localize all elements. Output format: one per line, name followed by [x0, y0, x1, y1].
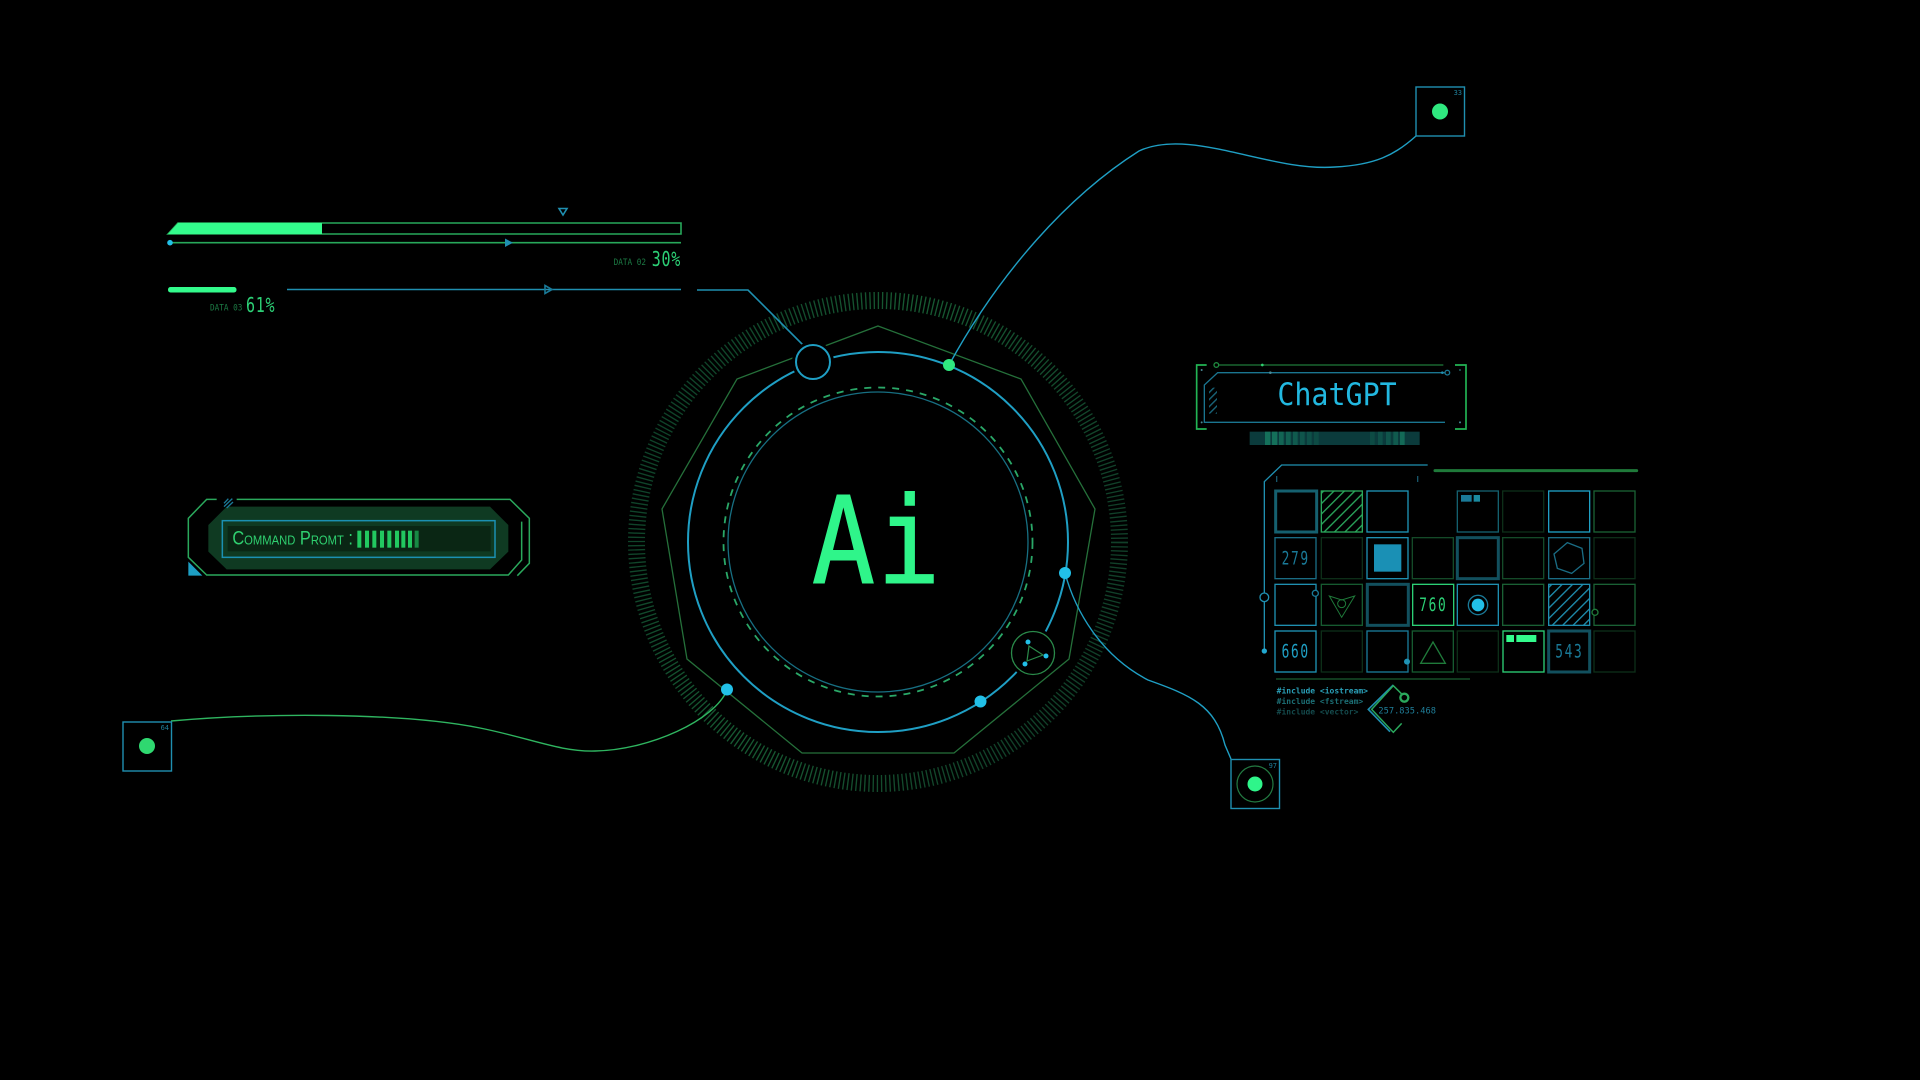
blue frame circle: [1445, 370, 1450, 375]
ring node: triangle: [1008, 628, 1058, 678]
green header bar: [1435, 466, 1637, 475]
input interior: [228, 526, 491, 551]
main blue ring: [688, 352, 1068, 732]
grid frame lines: [1264, 465, 1428, 652]
frame node: [1260, 593, 1269, 602]
central radial gauge: [636, 300, 1120, 784]
node box: bottom right: 97: [1269, 762, 1277, 770]
inner blue ring: [728, 392, 1028, 692]
ChatGPT header panel: [1197, 363, 1466, 445]
top green rail: [1219, 363, 1443, 367]
row 3 cells: [1275, 584, 1635, 625]
hatch mark: [224, 499, 233, 508]
rail start dot: [167, 240, 173, 246]
row 3 cells: 760: [1419, 593, 1447, 616]
frame dots: [1201, 369, 1461, 423]
nonagon outline: [662, 326, 1095, 753]
title: Ai: Ai: [812, 472, 942, 612]
data 02 caption: DATA 02: [614, 257, 646, 268]
row 2 cells: 279: [1282, 547, 1310, 569]
blue input box: [222, 521, 495, 557]
bracket right: [1455, 365, 1466, 429]
prompt text: Command Promt :: [232, 528, 353, 549]
number readout: 257.835.468: [1378, 706, 1436, 716]
short bar: [168, 287, 236, 292]
curve to left node: [171, 690, 727, 751]
tick ring: [636, 300, 1120, 784]
connector line to data bar: [697, 290, 805, 347]
diamond blue shadow: [1368, 685, 1393, 732]
row 1 cells: [1276, 491, 1635, 532]
blue frame: [1204, 373, 1445, 422]
data 02 value: 30%: [652, 248, 681, 272]
bar rail: [170, 242, 681, 244]
data grid panel: [1260, 465, 1637, 679]
rail dot: [1261, 364, 1264, 366]
rail circle: [1214, 363, 1219, 367]
command prompt panel: [188, 499, 529, 576]
curve to top right node: [949, 136, 1416, 365]
row 4 cells: 660: [1282, 640, 1310, 662]
data 02 progress bar: [167, 208, 681, 272]
blue rail: [287, 288, 681, 290]
bottom rule: [1276, 677, 1470, 681]
rail arrow: [545, 286, 552, 294]
diamond green outline: [1372, 686, 1402, 732]
frame end dot: [1262, 648, 1267, 654]
corner triangle: [188, 562, 202, 576]
code readout: #include <vector>: [1277, 706, 1359, 716]
data 03 caption: DATA 03: [210, 303, 242, 314]
ring dots: [721, 359, 1071, 708]
bar fill: [168, 223, 322, 234]
node box: left: [123, 722, 172, 771]
data 03 value: 61%: [246, 294, 275, 318]
bar track: [168, 223, 681, 234]
header ticks: [1277, 476, 1418, 482]
diamond circle: [1400, 694, 1408, 702]
code lines: #include <iostream>: [1277, 685, 1368, 695]
loading bars: [357, 531, 419, 548]
row 4 cells: 543: [1555, 640, 1583, 662]
node box: top right: 33: [1454, 89, 1462, 97]
marker triangle: [559, 208, 567, 215]
node box: top right: [1416, 87, 1464, 136]
outer frame: [188, 499, 529, 576]
data 03 progress bar: [168, 286, 681, 318]
row 2 cells: [1275, 538, 1635, 579]
bracket left: [1197, 365, 1207, 429]
status strip: [1250, 432, 1420, 445]
dashed green ring: [724, 388, 1032, 696]
ChatGPT title: ChatGPT: [1277, 377, 1397, 413]
dark plate: [208, 507, 508, 569]
node box: bottom right: [1231, 760, 1280, 808]
curve to bottom right node: [1065, 573, 1231, 759]
rail arrow: [505, 238, 513, 247]
hatch mark: [1209, 388, 1217, 414]
node box: left: 64: [161, 724, 169, 732]
row 4 cells: [1275, 631, 1635, 672]
code readout: [1277, 685, 1436, 732]
code readout: #include <fstream>: [1277, 696, 1363, 706]
ring node: top left: [792, 341, 834, 383]
